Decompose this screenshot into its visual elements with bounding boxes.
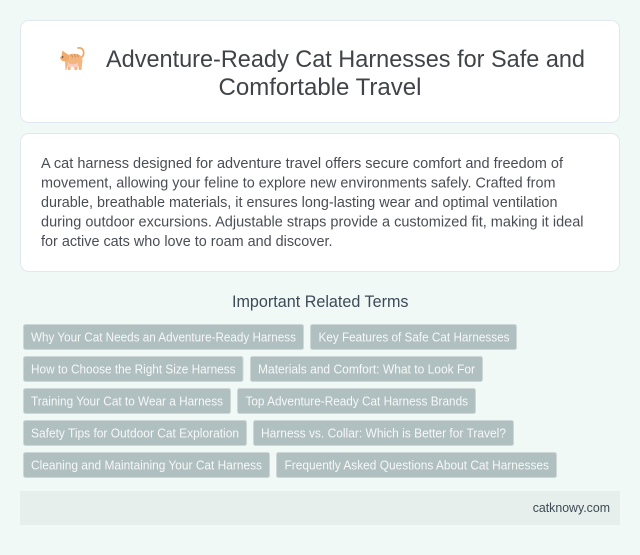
description text: for active cats who love to roam and discover. [41,233,332,250]
tag list [24,324,556,478]
tag: Top Adventure-Ready Cat Harness Brands [246,394,468,408]
tag: Cleaning and Maintaining Your Cat Harness [31,458,262,472]
footer bar [20,491,620,525]
description text: movement, allowing your feline to explore new environments safely. Crafted from [41,174,556,192]
tag: Materials and Comfort: What to Look For [258,362,476,376]
tag [24,324,304,350]
panel: description card [20,134,620,272]
description text [41,155,584,250]
description text: A cat harness designed for adventure travel offers secure comfort and freedom of [41,155,564,172]
tag: Why Your Cat Needs an Adventure-Ready Harness [31,330,296,344]
icon: cat [60,48,84,70]
tag: Harness vs. Collar: Which is Better for Travel? [261,426,506,440]
tag [24,356,243,382]
tag [254,420,514,446]
tag: Training Your Cat to Wear a Harness [31,394,223,408]
tag: Frequently Asked Questions About Cat Harnesses [284,458,549,472]
tag [250,356,482,382]
tag: How to Choose the Right Size Harness [31,362,236,376]
tag [24,452,270,478]
tag [276,452,556,478]
tag [24,388,230,414]
footer text: catknowy.com [533,500,610,515]
tag: Key Features of Safe Cat Harnesses [318,330,510,344]
description text: durable, breathable materials, it ensures long-lasting wear and optimal ventilation [41,194,558,211]
title text: Comfortable Travel [218,74,422,101]
tag [238,388,476,414]
title text [106,46,585,101]
tag [310,324,516,350]
tag: Safety Tips for Outdoor Cat Exploration [31,426,239,440]
tag [24,420,246,446]
title text: Adventure-Ready Cat Harnesses for Safe and [106,46,585,73]
description text: during outdoor excursions. Adjustable straps provide a customized fit, making it ideal [41,214,584,230]
heading: important related terms: Important Related Terms [232,293,408,311]
panel: title card [20,20,620,122]
